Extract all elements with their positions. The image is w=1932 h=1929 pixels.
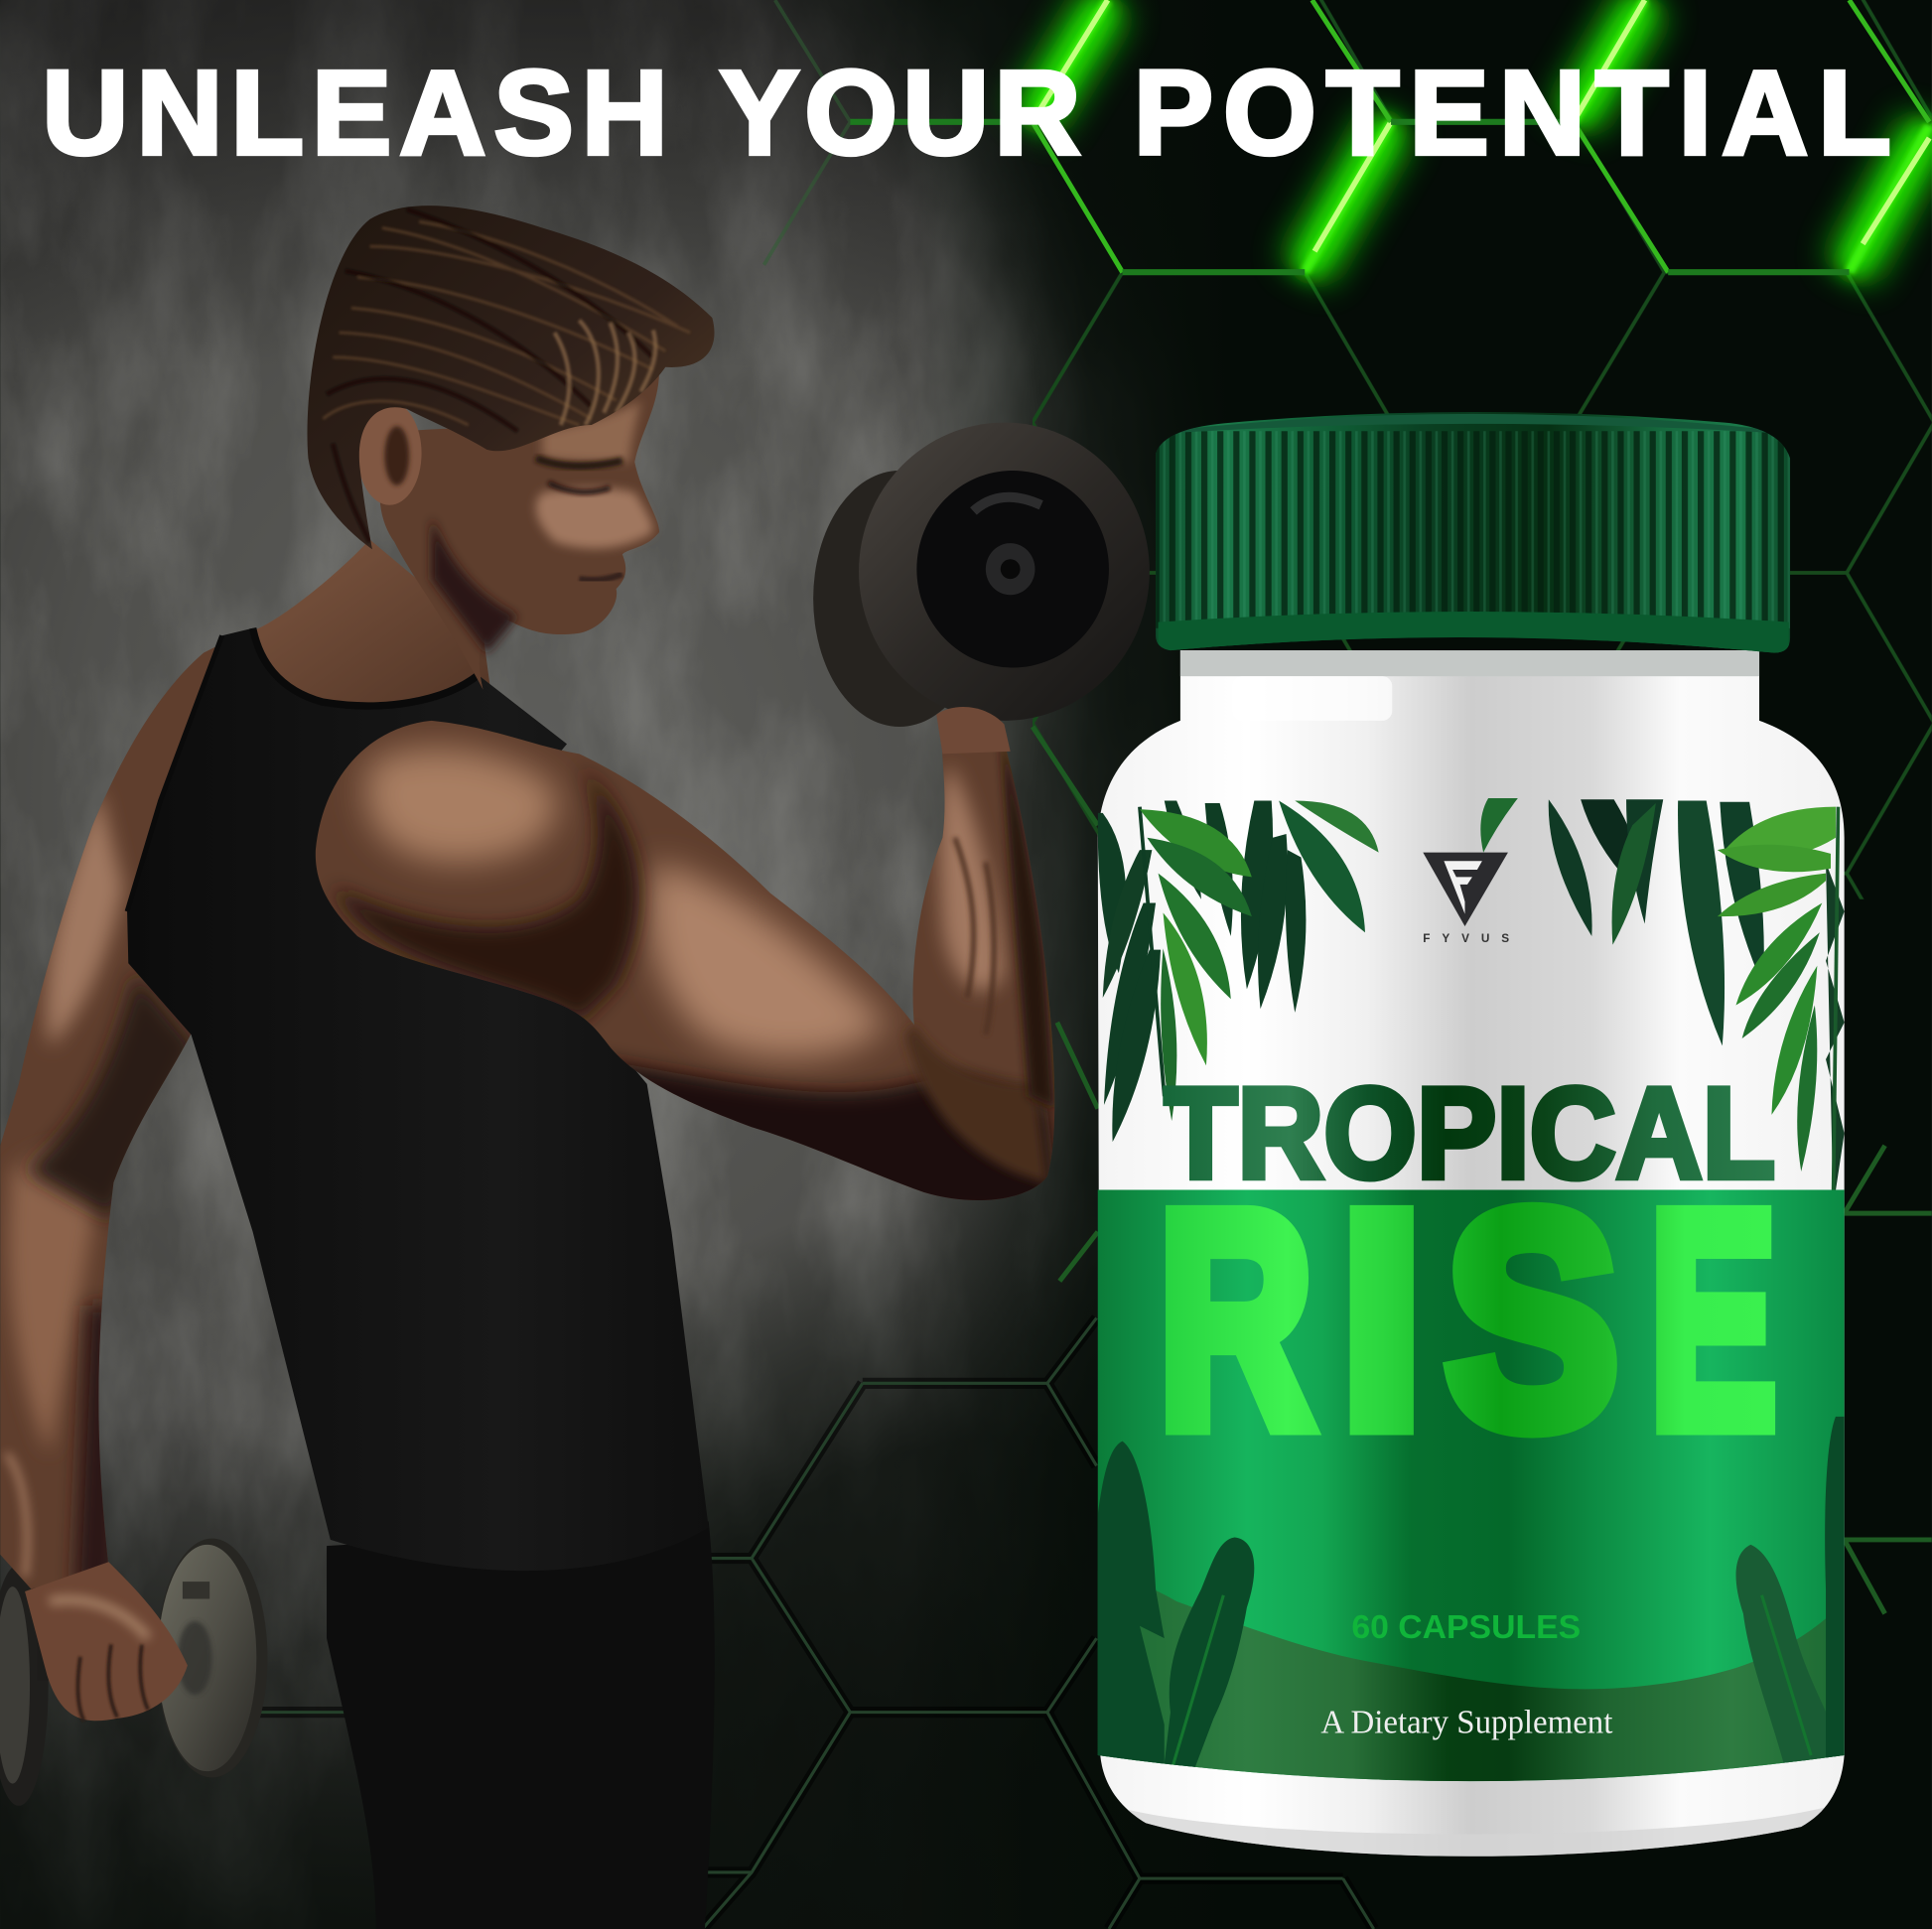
cap [1156, 412, 1790, 659]
neon glowing hexagon edges [850, 0, 1929, 272]
neck and upper back [253, 539, 490, 706]
head [357, 369, 659, 690]
upper dumbbell [813, 423, 1150, 727]
green label section [1098, 1190, 1845, 1811]
gripping fist [936, 707, 1011, 754]
left palm fronds [1098, 800, 1379, 1142]
product name: RISE [1159, 1150, 1776, 1491]
product name: RISE: E [1650, 1150, 1776, 1491]
hand [25, 1562, 188, 1721]
shorts [327, 1521, 715, 1929]
brand logo: FYVUS [1423, 932, 1509, 945]
product name: TROPICAL: TROPICAL [1165, 1060, 1775, 1205]
small top leaf [1480, 798, 1518, 853]
wave band [1098, 1590, 1845, 1781]
man lifting dumbbells [0, 206, 1150, 1929]
title: UNLEASH [42, 46, 668, 180]
label: white top with palm leaves [1098, 798, 1845, 1207]
bottle body [1098, 646, 1845, 1872]
brand logo [1423, 853, 1509, 945]
product bottle [1098, 412, 1845, 1872]
hair [308, 206, 715, 549]
product name: RISE: S [1446, 1150, 1619, 1491]
product name: RISE: R [1159, 1150, 1313, 1491]
dietary supplement line: A Dietary Supplement [1320, 1705, 1613, 1741]
banana leaves [1098, 1416, 1845, 1767]
title [42, 46, 1891, 180]
title: YOUR [720, 46, 1080, 180]
raised arm [316, 721, 1059, 1219]
product name: RISE: I [1339, 1150, 1425, 1491]
capsule count: 60 CAPSULES [1351, 1609, 1581, 1646]
tank top [127, 628, 709, 1571]
title: POTENTIAL [1134, 46, 1891, 180]
lower dumbbell [0, 1539, 268, 1806]
left arm [0, 640, 228, 1589]
right palm leaves [1549, 799, 1845, 1207]
